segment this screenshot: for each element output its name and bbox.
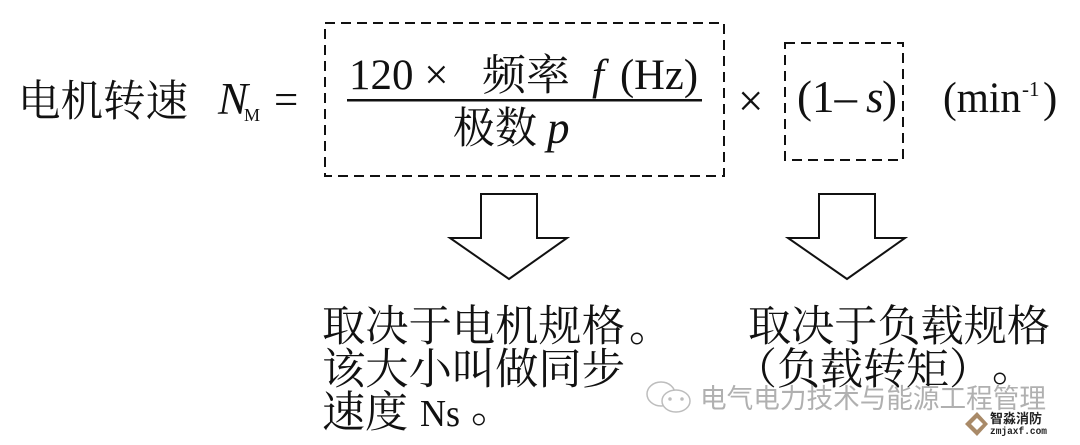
slip term: ) xyxy=(882,72,897,122)
arrow: right down arrow xyxy=(788,194,905,279)
fraction denominator: 极数 xyxy=(453,106,537,153)
slip term: (1– xyxy=(797,72,857,122)
site logo text: 智淼消防 xyxy=(990,411,1042,426)
site logo text xyxy=(990,411,1047,438)
right explanation text: （ xyxy=(734,347,777,394)
multiply sign: × xyxy=(738,76,763,126)
dashed box: synchronous speed fraction xyxy=(325,23,724,176)
left explanation text: 。 xyxy=(629,304,672,351)
fraction numerator xyxy=(349,52,698,100)
left explanation text: 速度 xyxy=(322,389,408,437)
fraction numerator: (Hz) xyxy=(620,52,698,99)
symbol NM equals: = xyxy=(274,77,298,124)
fraction numerator: 频率 xyxy=(482,52,570,100)
fraction bar xyxy=(347,99,702,102)
right explanation text: ） xyxy=(949,347,992,394)
arrow: left down arrow xyxy=(450,194,567,279)
right explanation text: 。 xyxy=(992,344,1035,391)
left explanation text: 。 xyxy=(471,385,514,432)
icon: wechat logo xyxy=(647,382,690,412)
fraction denominator: p xyxy=(544,103,570,153)
unit: ) xyxy=(1043,75,1057,122)
icon: site logo diamond xyxy=(965,412,988,436)
right explanation text: 负载转矩 xyxy=(777,346,949,394)
right explanation text: 取决于负载规格 xyxy=(748,303,1050,351)
symbol NM equals: N xyxy=(217,74,251,124)
site logo text: zmjaxf.com xyxy=(990,426,1047,438)
symbol NM equals: M xyxy=(244,105,260,125)
fraction numerator: 120 × xyxy=(349,52,449,99)
slip term xyxy=(797,72,897,122)
formula label: motor speed: 电机转速 xyxy=(18,79,188,126)
right explanation text xyxy=(734,303,1050,394)
symbol NM equals xyxy=(217,74,298,125)
left explanation text xyxy=(322,304,672,437)
unit: -1 xyxy=(1022,77,1040,101)
left explanation text: 取决于电机规格 xyxy=(322,304,625,351)
fraction numerator: f xyxy=(592,52,609,99)
fraction denominator xyxy=(453,103,570,153)
unit: (min xyxy=(943,75,1021,122)
slip term: s xyxy=(866,72,884,122)
dashed box: slip term xyxy=(785,43,903,160)
left explanation text: Ns xyxy=(420,393,460,435)
left explanation text: 该大小叫做同步 xyxy=(322,347,625,394)
watermark text: 电气电力技术与能源工程管理 xyxy=(700,384,1046,414)
